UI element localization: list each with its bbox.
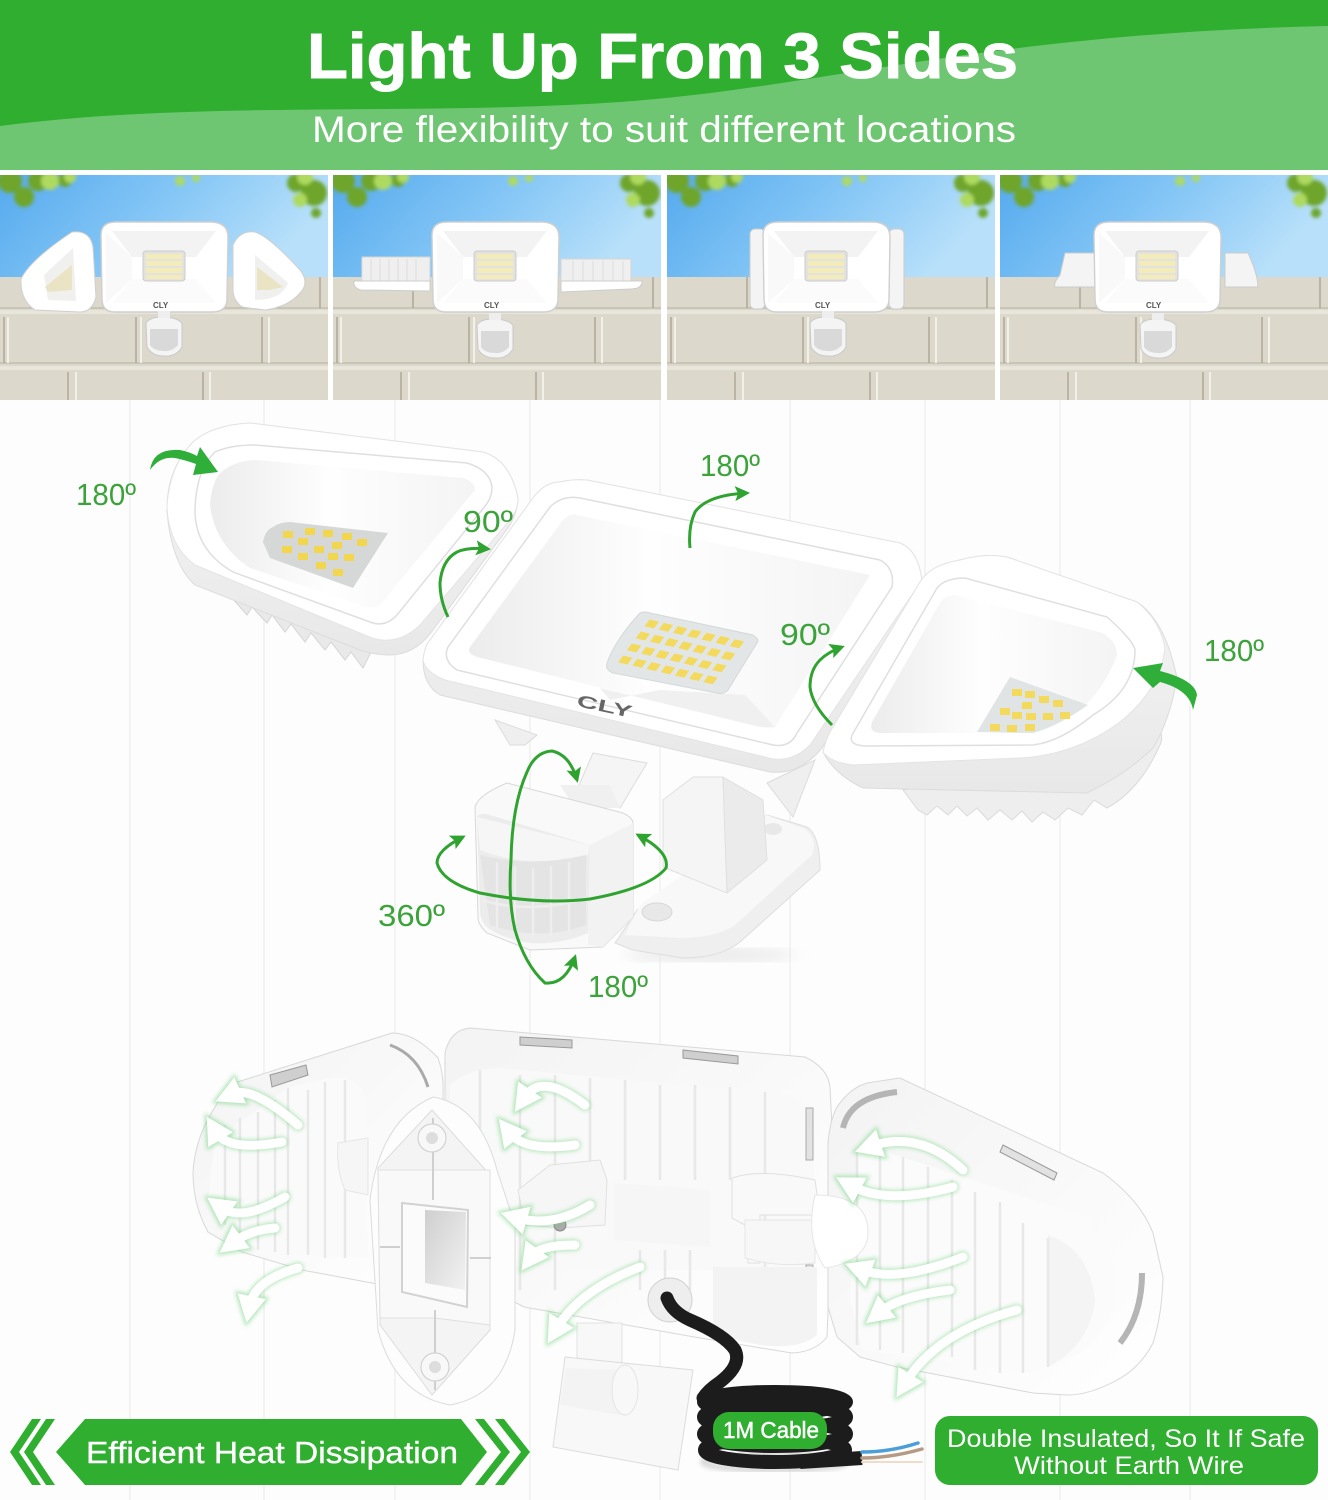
sensor from behind (553, 1323, 693, 1470)
insulation note: Without Earth Wire (1014, 1452, 1244, 1480)
arrow: top 180 (690, 493, 747, 548)
photo 1: heads facing forward (0, 169, 328, 400)
rotation arrows (150, 447, 1197, 983)
tile dividers (328, 175, 1000, 400)
arrow: right hinge 90 (810, 647, 842, 725)
subtitle: More flexibility to suit different locations (312, 109, 1016, 150)
rear view floodlight (193, 1028, 1163, 1470)
heat dissipation banner: Efficient Heat Dissipation (86, 1435, 458, 1470)
header banner (0, 0, 1328, 170)
head lower brackets (495, 720, 815, 817)
left head fins (232, 598, 372, 668)
photo 3: heads folded back (665, 169, 995, 400)
arrow: vertical 180 (510, 751, 577, 983)
center LED module (607, 612, 758, 694)
left rear head (193, 1033, 444, 1295)
right rear head (828, 1078, 1163, 1395)
cable gland (648, 1278, 692, 1322)
cable length label (713, 1412, 827, 1449)
angle labels (76, 448, 1264, 1004)
left LED module (263, 522, 388, 588)
right head rear and fins (903, 720, 1162, 822)
angle labels: 180º (76, 477, 136, 512)
mount base (560, 753, 820, 961)
front view floodlight (76, 423, 1264, 1004)
arrow: right head 180 (1133, 663, 1197, 710)
sensor arm (577, 753, 647, 808)
title: Light Up From 3 Sides (307, 20, 1018, 92)
insulation note (935, 1416, 1318, 1485)
header light green wave (0, 26, 1328, 170)
right head (823, 556, 1177, 793)
arrow: left head 180 (150, 447, 218, 475)
angle labels: 180º (700, 448, 760, 483)
photo 4: heads folded in (998, 169, 1328, 400)
white strip below header (0, 170, 1328, 175)
rear hinges (732, 1173, 820, 1263)
power cable and coil (667, 1298, 922, 1470)
photo 2: heads folded flat (331, 169, 661, 400)
angle labels: 90º (780, 617, 830, 652)
angle labels: 180º (1204, 633, 1264, 668)
heat dissipation banner (10, 1419, 530, 1485)
left head (167, 423, 518, 655)
arrow: left hinge 90 (440, 548, 488, 617)
angle labels: 360º (378, 898, 445, 933)
angle labels: 90º (463, 504, 513, 539)
right LED module (977, 677, 1088, 733)
cable length label: 1M Cable (723, 1417, 819, 1443)
arrow: horizontal 360 (437, 835, 666, 901)
angle labels: 180º (588, 969, 648, 1004)
center rear head (445, 1028, 834, 1353)
center head (423, 480, 922, 772)
insulation note: Double Insulated, So It If Safe (947, 1425, 1305, 1453)
mounting plate (370, 1097, 515, 1405)
heat dissipation arrows (216, 1086, 1017, 1382)
brand logo: CLY (575, 691, 635, 722)
connector block (518, 1160, 607, 1228)
motion sensor (475, 783, 633, 950)
